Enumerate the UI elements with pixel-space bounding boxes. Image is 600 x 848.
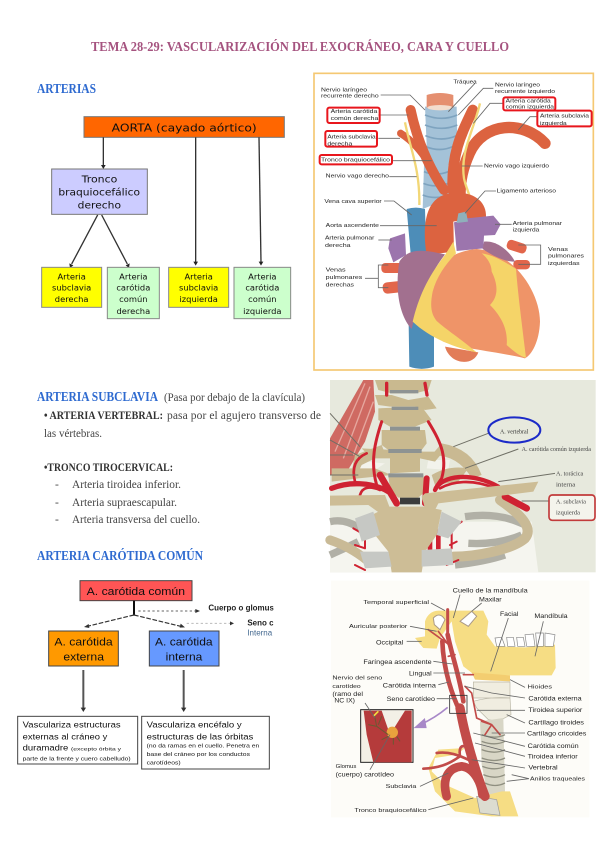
label: a. vertebral bbox=[488, 417, 540, 443]
teeth bbox=[495, 633, 555, 646]
arrows from tronco bbox=[69, 215, 130, 268]
anatomy labels: Hioides bbox=[528, 685, 552, 691]
vertebrae bbox=[362, 380, 443, 498]
box: a. carotida interna bbox=[149, 631, 219, 666]
box: subclavia izquierda bbox=[169, 267, 229, 307]
label: seno carotideo: Seno carotídeo bbox=[247, 619, 305, 628]
leader lines bbox=[365, 83, 541, 288]
label: seno carotideo: Interna bbox=[247, 629, 273, 638]
hyoid bbox=[472, 672, 510, 681]
anatomy labels: Faríngea ascendente bbox=[363, 659, 432, 666]
text block: tronco tirocervical: •TRONCO TIROCERVICAL: bbox=[44, 462, 173, 474]
box: tronco braquiocefalico: derecho bbox=[78, 200, 121, 211]
rib cage background bbox=[330, 515, 538, 572]
anatomy labels: (cuerpo) carotídeo bbox=[336, 773, 395, 779]
box: vasculariza encefalo bbox=[142, 716, 269, 769]
anatomy labels: Vertebral bbox=[528, 766, 558, 772]
heart labels: derecha bbox=[327, 141, 352, 147]
heart labels: pulmonares bbox=[326, 275, 363, 281]
ascending aorta bbox=[425, 193, 486, 255]
box: subclavia derecha: derecha bbox=[55, 294, 89, 304]
box: tronco braquiocefalico bbox=[52, 169, 147, 214]
box: carotida comun izquierda: carótida bbox=[245, 283, 279, 293]
box: subclavia izquierda: Arteria bbox=[184, 271, 213, 281]
muscle bbox=[330, 380, 375, 475]
heart labels: Aorta ascendente bbox=[326, 223, 379, 229]
box: vasculariza estructuras externas: externas al cráneo y bbox=[23, 732, 108, 742]
box: vasculariza estructuras externas bbox=[18, 716, 138, 764]
carotid sinus box bbox=[450, 695, 467, 713]
heart body bbox=[413, 249, 540, 358]
anatomy labels: Carótida interna bbox=[383, 684, 437, 690]
anatomy labels: Cartílago cricoides bbox=[527, 730, 586, 737]
anatomy labels: Tronco braquiocefálico bbox=[354, 808, 427, 814]
box: vasculariza encefalo: carotídeos) bbox=[147, 760, 181, 766]
box: carotida comun derecha: común bbox=[119, 294, 148, 304]
text block: tronco tirocervical: Arteria supraescapular. bbox=[72, 497, 177, 509]
connector lines bbox=[84, 601, 234, 628]
box: subclavia derecha: Arteria bbox=[57, 271, 86, 281]
box: carotida comun derecha: derecha bbox=[116, 306, 150, 316]
anatomy labels: Lingual bbox=[409, 671, 432, 677]
label: seno carotideo bbox=[248, 620, 274, 636]
label: cuerpo o glomus: Cuerpo o glomus carotídeo bbox=[208, 603, 312, 612]
box: vasculariza estructuras externas: parte de la frente y cuero cabelludo) bbox=[23, 756, 131, 762]
intervertebral discs bbox=[388, 390, 423, 504]
arrows from aorta bbox=[101, 137, 263, 266]
trachea bbox=[423, 93, 457, 209]
box: subclavia izquierda: subclavia bbox=[179, 283, 218, 293]
inset pointer arrow bbox=[416, 707, 448, 727]
heart labels: izquierda bbox=[540, 121, 567, 127]
anatomy labels: Seno carotídeo bbox=[387, 697, 436, 703]
heart labels: común izquierda bbox=[506, 104, 554, 110]
heart labels: derecha bbox=[325, 243, 351, 249]
heart labels: Nervio laríngeo bbox=[321, 87, 367, 93]
heart labels: izquierda bbox=[513, 228, 539, 234]
heart labels: Arteria pulmonar bbox=[513, 221, 562, 227]
anatomy labels bbox=[332, 587, 586, 814]
text block: arteria vertebral: • ARTERIA VERTEBRAL: bbox=[44, 410, 163, 422]
anatomy labels: Carótida común bbox=[528, 744, 579, 750]
heart labels: Arteria subclavia bbox=[540, 114, 589, 120]
box: vasculariza encefalo: (no da ramas en el cuello. Penetra en bbox=[147, 744, 259, 750]
anatomy labels: Occipital bbox=[376, 640, 403, 647]
box: carotida comun izquierda bbox=[234, 267, 291, 319]
anatomy labels: Tiroidea superior bbox=[528, 708, 582, 714]
leader lines bbox=[330, 413, 555, 501]
box: carotida comun derecha: Arteria bbox=[119, 271, 148, 281]
heart labels: Tronco braquiocefálico bbox=[321, 158, 390, 164]
anatomy labels: Auricular posterior bbox=[349, 624, 408, 630]
label: a. toracica interna: A. torácica bbox=[556, 472, 584, 478]
clavicle and first rib bbox=[428, 748, 518, 816]
heart labels: recurrente izquierdo bbox=[495, 89, 555, 95]
box: carotida comun izquierda: Arteria bbox=[248, 271, 277, 281]
heart labels: Vena cava superior bbox=[324, 199, 382, 205]
label: a. subclavia izquierda: izquierda bbox=[556, 510, 580, 516]
anatomy labels: Cuello de la mandíbula bbox=[453, 587, 528, 594]
text block: arteria vertebral: las vértebras. bbox=[44, 428, 102, 440]
box: tronco braquiocefalico: Tronco bbox=[81, 174, 117, 185]
label: a. vertebral: A. vertebral bbox=[500, 428, 529, 435]
note: debajo de la clavicula: (Pasa por debajo de la clavícula) bbox=[164, 392, 305, 404]
anatomy labels: Maxilar bbox=[479, 598, 502, 604]
lower ribs bbox=[330, 500, 528, 560]
box: a. carotida comun: A. carótida común bbox=[87, 586, 185, 598]
heart labels: Ligamento arterioso bbox=[497, 189, 556, 195]
vena cava bbox=[407, 208, 434, 369]
box: carotida comun izquierda: común bbox=[248, 294, 277, 304]
heart labels: recurrente derecho bbox=[321, 93, 379, 99]
anatomy labels: Nervio del seno bbox=[332, 675, 382, 681]
first ribs bbox=[332, 443, 482, 485]
box: subclavia izquierda: izquierda bbox=[179, 294, 218, 304]
inset: carotid body bbox=[361, 710, 413, 762]
vagus nerves bbox=[405, 103, 480, 212]
leader lines bbox=[365, 595, 543, 810]
box: tronco braquiocefalico: braquiocefálico bbox=[58, 186, 140, 198]
box: carotida comun derecha bbox=[107, 267, 159, 319]
title: TEMA 28-29: VASCULARIZACIÓN DEL EXOCRÁNEO, CARA Y CUELLO bbox=[91, 39, 509, 54]
label: a. carotida comun izquierda: A. carótida común izquierda bbox=[522, 447, 591, 453]
box: carotida comun derecha: carótida bbox=[116, 283, 150, 293]
heart labels: Arteria carótida bbox=[506, 98, 551, 104]
common carotid and branches bbox=[423, 610, 500, 796]
anatomy labels: carotídeo bbox=[332, 684, 361, 690]
condyle detail bbox=[433, 611, 477, 630]
box: subclavia derecha bbox=[42, 267, 102, 307]
box: a. carotida externa bbox=[49, 631, 118, 666]
anatomy labels: Tiroidea inferior bbox=[528, 754, 578, 760]
heart labels: Tráquea bbox=[453, 79, 477, 85]
box: aorta bbox=[84, 117, 284, 137]
thyroid and larynx bbox=[473, 682, 511, 721]
text block: arteria vertebral bbox=[44, 410, 321, 440]
anatomy labels: Anillos traqueales bbox=[530, 776, 585, 782]
heart labels: Arteria subclavia bbox=[327, 134, 376, 140]
flowchart: carotid branches bbox=[17, 580, 274, 770]
clavicles and sternum bbox=[330, 482, 538, 572]
box: a. carotida interna: interna bbox=[166, 651, 202, 663]
ligamentum arteriosum bbox=[457, 212, 468, 223]
label: a. toracica interna: interna bbox=[556, 483, 576, 489]
arrows down bbox=[81, 670, 186, 712]
box: a. carotida comun bbox=[80, 581, 192, 601]
mandible and skull bbox=[415, 611, 556, 675]
illustration: neck arteries photo bbox=[330, 380, 596, 572]
heading: arterias: ARTERIAS bbox=[37, 81, 96, 96]
trachea rings bbox=[480, 718, 505, 798]
heading: arteria carotida comun: ARTERIA CARÓTIDA COMÚN bbox=[37, 548, 203, 563]
heart labels bbox=[321, 79, 589, 288]
anatomy labels: Carótida externa bbox=[528, 696, 582, 702]
illustration: carotid anatomy bbox=[331, 581, 589, 817]
box: subclavia derecha: subclavia bbox=[52, 283, 91, 293]
flowchart: aorta branches bbox=[42, 117, 291, 319]
box: vasculariza encefalo: estructuras de las órbitas bbox=[147, 731, 253, 741]
label: a. subclavia izquierda: A. subclavia bbox=[556, 500, 586, 506]
text block: tronco tirocervical: - bbox=[55, 479, 59, 491]
box: vasculariza encefalo: Vasculariza encéfalo y bbox=[147, 720, 243, 730]
heart labels: Venas bbox=[326, 268, 346, 274]
text block: tronco tirocervical bbox=[44, 462, 200, 526]
left atrium bbox=[483, 242, 515, 262]
anatomy labels: Mandíbula bbox=[534, 614, 568, 620]
heart labels: pulmonares bbox=[548, 254, 584, 260]
box: a. carotida externa: externa bbox=[63, 651, 104, 663]
text block: tronco tirocervical: Arteria tiroidea inferior. bbox=[72, 479, 181, 491]
heart base stub bbox=[445, 347, 478, 362]
label: a. toracica interna bbox=[556, 472, 584, 489]
text block: tronco tirocervical: Arteria transversa del cuello. bbox=[72, 514, 200, 526]
red highlight boxes bbox=[320, 97, 592, 164]
text block: arteria vertebral: pasa por el agujero transverso de bbox=[167, 410, 321, 422]
red arteries bbox=[332, 383, 527, 570]
anatomy labels: Cartílago tiroides bbox=[528, 720, 584, 727]
text block: tronco tirocervical: - bbox=[55, 497, 59, 509]
box: vasculariza estructuras externas: (excepto órbita y bbox=[71, 747, 122, 753]
pulmonary artery bbox=[388, 216, 501, 262]
heart labels: izquierdas bbox=[548, 261, 580, 267]
heading: arteria subclavia: ARTERIA SUBCLAVIA bbox=[37, 389, 158, 404]
box: vasculariza estructuras externas: Vasculariza estructuras bbox=[23, 720, 121, 730]
coronary fat bbox=[413, 242, 526, 358]
heart labels: Arteria pulmonar bbox=[325, 236, 375, 242]
box: vasculariza estructuras externas: duramadre bbox=[23, 743, 69, 753]
anatomy labels: Facial bbox=[500, 611, 518, 618]
heart labels: común derecha bbox=[331, 116, 378, 122]
heart labels: derechas bbox=[326, 282, 354, 288]
arteries of the arch bbox=[401, 110, 545, 197]
anatomy labels: Temporal superficial bbox=[363, 600, 429, 606]
heart labels: Nervio vago derecho bbox=[326, 174, 389, 180]
heart labels: Nervio laríngeo bbox=[495, 82, 540, 88]
right atrium bbox=[398, 251, 445, 329]
box: carotida comun izquierda: izquierda bbox=[243, 306, 282, 316]
illustration: heart and great vessels bbox=[314, 73, 593, 370]
pulmonary veins bbox=[381, 239, 530, 294]
anatomy labels: Glomus bbox=[336, 764, 357, 770]
box: vasculariza encefalo: base del cráneo por los conductos bbox=[147, 752, 250, 758]
anatomy labels: NC IX) bbox=[334, 699, 355, 705]
gaps beneath first ribs bbox=[358, 460, 450, 470]
box: a. carotida interna: A. carótida bbox=[155, 637, 213, 649]
label: a. subclavia izquierda bbox=[549, 495, 595, 520]
anatomy labels: Subclavia bbox=[386, 784, 416, 790]
box: aorta: AORTA (cayado aórtico) bbox=[112, 122, 257, 135]
box: a. carotida externa: A. carótida bbox=[54, 637, 113, 649]
heart labels: Venas bbox=[548, 247, 568, 253]
anatomy labels: (ramo del bbox=[332, 692, 363, 698]
heart labels: Nervio vago izquierdo bbox=[484, 164, 549, 170]
text block: tronco tirocervical: - bbox=[55, 514, 59, 526]
heart labels: Arteria carótida bbox=[331, 109, 377, 115]
